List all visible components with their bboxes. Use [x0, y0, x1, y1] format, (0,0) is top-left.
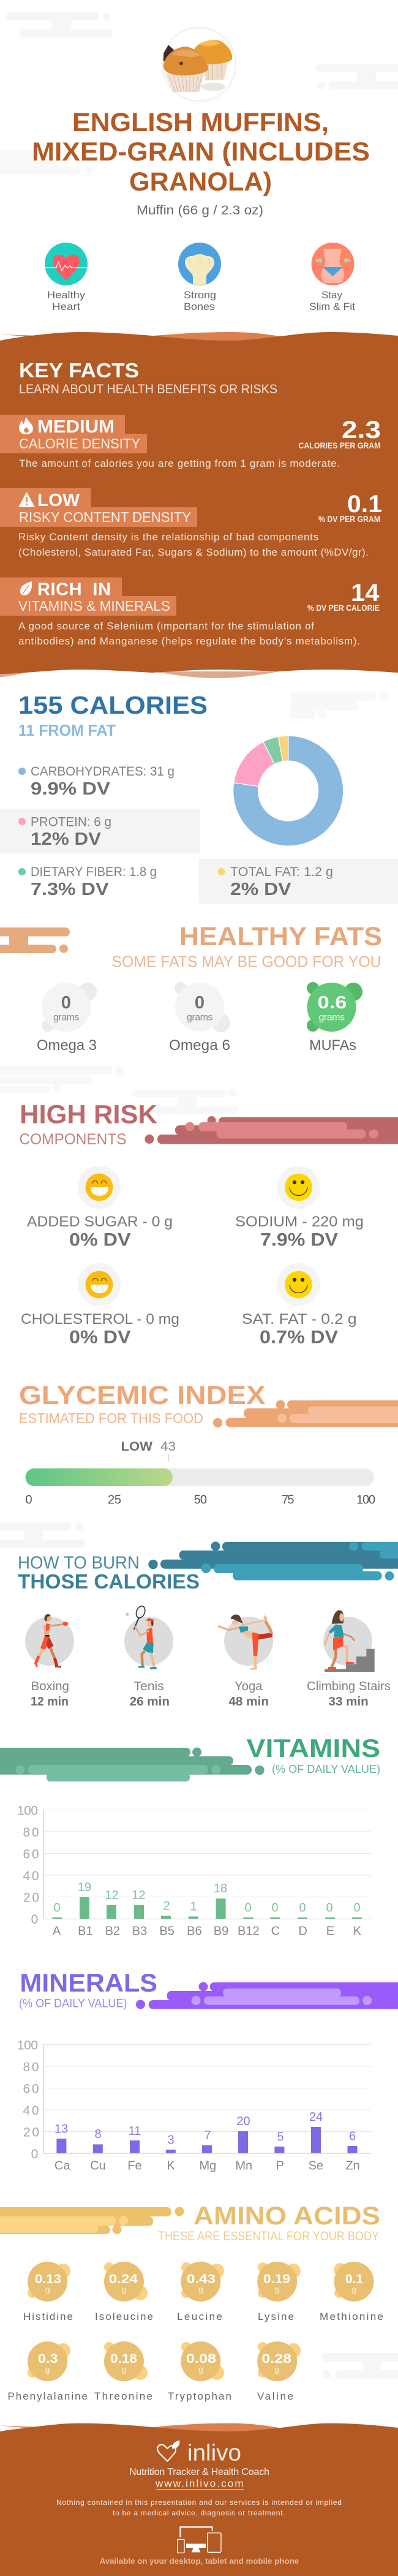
- activity: boxing: Boxing: [31, 1680, 69, 1693]
- fact: low risky content density: % DV PER GRAM: [318, 514, 380, 524]
- amino acid: methionine: Methionine: [320, 2311, 383, 2322]
- heading: key facts: KEY FACTS: [19, 359, 139, 382]
- amino acid: methionine: g: [351, 2284, 356, 2294]
- section band: burn calories: [148, 1541, 398, 1581]
- amino acid: histidine: 0.13: [35, 2272, 61, 2286]
- activity: tennis: Tenis: [134, 1680, 164, 1693]
- bar chart: minerals: 24: [309, 2110, 323, 2124]
- amino acid: tryptophan: Tryptophan: [168, 2390, 231, 2402]
- fact: low risky content density: Risky Content density is the relationship of bad components: [18, 531, 318, 543]
- fact: medium calorie density: CALORIE DENSITY: [19, 436, 140, 451]
- decorative cloud: calories: [290, 692, 389, 719]
- subheading: calories from fat: 11 FROM FAT: [18, 721, 116, 739]
- bar chart: vitamins: 100: [17, 1804, 38, 1818]
- bar chart: vitamins: B12: [238, 1925, 260, 1938]
- amino acid: tryptophan: 0.08: [186, 2352, 216, 2366]
- benefit: stay slim and fit: Stay: [321, 289, 342, 301]
- bar chart: minerals: 20: [23, 2126, 39, 2139]
- bar chart: minerals: 8: [94, 2128, 102, 2141]
- website link: www.inlivo.com: [155, 2477, 244, 2490]
- bar chart: vitamins: B2: [105, 1925, 120, 1938]
- section band: healthy fats: [0, 927, 70, 953]
- disclaimer: to be a medical advice, diagnosis or treatment.: [113, 2509, 285, 2517]
- risk: sodium: SODIUM - 220 mg: [235, 1214, 364, 1230]
- risk: added sugar: 0% DV: [69, 1230, 131, 1250]
- bar chart: vitamins: 80: [23, 1826, 39, 1840]
- benefit: strong bones: Bones: [184, 301, 215, 312]
- gauge: glycemic index: LOW: [121, 1440, 152, 1454]
- amino acid: lysine: 0.19: [263, 2272, 290, 2286]
- bar chart: vitamins: 0: [299, 1902, 306, 1915]
- serving size: Muffin (66 g / 2.3 oz): [137, 203, 263, 217]
- section band: amino acids: [0, 2207, 184, 2234]
- bar chart: minerals: 3: [167, 2133, 175, 2147]
- section band: vitamins: [0, 1747, 265, 1781]
- bar chart: minerals: 13: [54, 2122, 68, 2136]
- bar chart: minerals: 40: [23, 2104, 39, 2118]
- amino acid: isoleucine: 0.24: [109, 2272, 138, 2286]
- benefit: stay slim and fit: [309, 243, 355, 312]
- bar chart: vitamins: 18: [214, 1882, 227, 1895]
- tagline: Nutrition Tracker & Health Coach: [129, 2467, 269, 2477]
- benefit: strong bones: Strong: [184, 289, 216, 301]
- fact: low risky content density: [0, 488, 382, 558]
- food photo: muffins: [162, 28, 236, 101]
- activity: yoga: Yoga: [235, 1680, 263, 1693]
- benefit: strong bones: [178, 243, 221, 312]
- fact: medium calorie density: The amount of calories you are getting from 1 gram is moderate.: [19, 458, 340, 469]
- legend: protein: PROTEIN: 6 g: [31, 815, 111, 829]
- heading: high risk: HIGH RISK: [20, 1100, 157, 1130]
- fact: medium calorie density: CALORIES PER GRAM: [299, 440, 381, 450]
- amino acid: isoleucine: [95, 2262, 153, 2322]
- bar chart: minerals: Zn: [345, 2159, 360, 2172]
- bar chart: minerals: [17, 2039, 371, 2172]
- fat: omega 6: grams: [187, 1012, 213, 1023]
- amino acid: leucine: 0.43: [187, 2272, 216, 2286]
- amino acid: phenylalanine: Phenylalanine: [7, 2390, 88, 2402]
- fact: rich in vitamins and minerals: [0, 577, 380, 647]
- bar chart: vitamins: 20: [23, 1890, 39, 1905]
- risk: saturated fat: 0.7% DV: [260, 1328, 338, 1348]
- bar chart: vitamins: 12: [105, 1889, 119, 1902]
- subheading: minerals: (% OF DAILY VALUE): [19, 1998, 127, 2011]
- bar chart: vitamins: 60: [23, 1848, 39, 1861]
- title: GRANOLA): [129, 167, 272, 197]
- bar chart: vitamins: 0: [353, 1902, 361, 1915]
- amino acid: threonine: Threonine: [94, 2390, 152, 2402]
- amino acid: methionine: 0.1: [345, 2272, 363, 2286]
- gauge: glycemic index: 43: [160, 1440, 176, 1454]
- benefit: healthy heart: Healthy: [47, 289, 86, 301]
- bar chart: minerals: 60: [23, 2082, 39, 2096]
- amino acid: methionine: [320, 2262, 383, 2322]
- logo: inlivo: inlivo: [187, 2441, 241, 2466]
- legend: carbohydrates: 9.9% DV: [31, 779, 111, 799]
- bar chart: minerals: Se: [309, 2159, 323, 2172]
- bar chart: minerals: 5: [277, 2131, 284, 2144]
- decorative cloud: right of muffin: [315, 64, 398, 89]
- benefit: healthy heart: Heart: [52, 301, 80, 312]
- subheading: LEARN ABOUT HEALTH BENEFITS OR RISKS: [19, 382, 277, 396]
- fat: omega 6: [169, 982, 230, 1054]
- subheading: components: COMPONENTS: [20, 1131, 126, 1148]
- risk: added sugar: ADDED SUGAR - 0 g: [27, 1214, 173, 1230]
- amino acid: phenylalanine: 0.3: [38, 2352, 58, 2366]
- fat: MUFAs: 0.6: [317, 993, 347, 1013]
- bar chart: vitamins: 1: [190, 1900, 197, 1914]
- title: [32, 108, 370, 197]
- bar chart: minerals: 80: [23, 2060, 39, 2074]
- bar chart: minerals: Cu: [90, 2159, 106, 2172]
- fact: medium calorie density: 2.3: [342, 417, 381, 444]
- heading: glycemic index: GLYCEMIC INDEX: [19, 1381, 266, 1410]
- legend: total fat: TOTAL FAT: 1.2 g: [230, 865, 333, 879]
- icon: devices: [178, 2527, 221, 2553]
- bar chart: vitamins: 0: [53, 1902, 61, 1915]
- heading: how to burn: HOW TO BURN: [18, 1554, 140, 1573]
- availability note: Available on your desktop, tablet and mobile phone: [100, 2556, 299, 2566]
- fat: omega 3: Omega 3: [37, 1037, 97, 1054]
- fact: medium calorie density: [0, 415, 381, 469]
- risk: saturated fat: [242, 1263, 356, 1348]
- legend: carbohydrates: CARBOHYDRATES: 31 g: [31, 765, 175, 779]
- risk: cholesterol: [21, 1263, 179, 1348]
- gauge: glycemic index: 0: [26, 1494, 32, 1507]
- bar chart: vitamins: C: [271, 1925, 280, 1938]
- bar chart: vitamins: B5: [159, 1925, 175, 1938]
- risk: saturated fat: SAT. FAT - 0.2 g: [242, 1311, 356, 1328]
- risk: sodium: [235, 1166, 364, 1250]
- fat: MUFAs: grams: [318, 1012, 345, 1023]
- bar chart: minerals: Mn: [235, 2159, 252, 2172]
- activity: boxing: 12 min: [31, 1695, 69, 1709]
- heading: amino acids: AMINO ACIDS: [193, 2201, 380, 2230]
- bar chart: vitamins: B3: [132, 1925, 147, 1938]
- risk: added sugar: [27, 1166, 173, 1250]
- fat: MUFAs: MUFAs: [309, 1037, 356, 1054]
- amino acid: isoleucine: Isoleucine: [95, 2311, 153, 2322]
- amino acid: leucine: g: [198, 2284, 203, 2294]
- decorative cloud: above high risk: [0, 1065, 239, 1114]
- fact: rich in vitamins and minerals: % DV PER CALORIE: [307, 603, 380, 613]
- fact: low risky content density: RISKY CONTENT DENSITY: [19, 509, 191, 525]
- amino acid: valine: [257, 2341, 301, 2402]
- gauge: glycemic index: [26, 1440, 375, 1507]
- bar chart: minerals: Ca: [54, 2159, 70, 2172]
- amino acid: phenylalanine: g: [45, 2365, 50, 2374]
- activity: tennis: 26 min: [130, 1695, 170, 1709]
- benefit: healthy heart: [45, 243, 88, 312]
- gauge: glycemic index: 50: [194, 1494, 207, 1507]
- bar chart: vitamins: 0: [31, 1913, 38, 1927]
- section band: high risk: [145, 1116, 398, 1144]
- amino acid: threonine: g: [121, 2365, 126, 2374]
- panel: footer: [0, 2423, 398, 2576]
- bar chart: minerals: 11: [129, 2125, 141, 2138]
- activity: climbing stairs: Climbing Stairs: [307, 1680, 391, 1693]
- disclaimer: [56, 2498, 342, 2517]
- fact: rich in vitamins and minerals: RICH IN: [37, 580, 111, 599]
- bar chart: vitamins: A: [53, 1925, 61, 1938]
- decorative cloud: top left: [6, 12, 113, 38]
- gauge: glycemic index: 75: [282, 1494, 294, 1507]
- amino acid: isoleucine: g: [121, 2284, 126, 2294]
- amino acid: tryptophan: [168, 2341, 231, 2402]
- activity: climbing stairs: [307, 1610, 391, 1709]
- amino acid: valine: 0.28: [261, 2352, 291, 2366]
- amino acid: histidine: [23, 2262, 73, 2322]
- bar chart: vitamins: E: [326, 1925, 334, 1938]
- legend: dietary fiber: [18, 865, 157, 899]
- subheading: vitamins: (% OF DAILY VALUE): [272, 1762, 380, 1775]
- bar chart: vitamins: B1: [78, 1925, 93, 1938]
- legend: protein: 12% DV: [31, 829, 102, 849]
- bar chart: vitamins: K: [353, 1925, 362, 1938]
- legend: protein: [0, 809, 200, 854]
- bar chart: vitamins: D: [298, 1925, 307, 1938]
- decorative cloud: behind title: [0, 149, 93, 175]
- heading: healthy fats: HEALTHY FATS: [179, 922, 382, 951]
- fact: low risky content density: (Cholesterol, Saturated Fat, Sugars & Sodium) to the amount (%DV/gr).: [18, 546, 369, 558]
- subheading: glycemic index: ESTIMATED FOR THIS FOOD: [19, 1410, 203, 1426]
- amino acid: leucine: [177, 2262, 224, 2322]
- heading: minerals: MINERALS: [20, 1968, 157, 1997]
- section band: glycemic index: [213, 1400, 398, 1427]
- amino acid: threonine: [94, 2341, 152, 2402]
- activity: yoga: [218, 1615, 273, 1709]
- bar chart: minerals: 6: [349, 2130, 356, 2144]
- fat: MUFAs: [307, 982, 362, 1054]
- fact: rich in vitamins and minerals: VITAMINS & MINERALS: [18, 598, 170, 614]
- bar chart: minerals: Mg: [200, 2159, 216, 2172]
- panel: key facts: [0, 332, 398, 678]
- amino acid: lysine: g: [274, 2284, 279, 2294]
- fat: omega 6: 0: [195, 993, 205, 1013]
- gauge: glycemic index: 100: [356, 1494, 375, 1507]
- heading: calories: 155 CALORIES: [18, 691, 208, 719]
- fact: low risky content density: LOW: [37, 491, 80, 510]
- bar chart: minerals: K: [167, 2159, 175, 2172]
- amino acid: histidine: g: [45, 2284, 50, 2294]
- fact: rich in vitamins and minerals: antibodies) and Manganese (helps regulate the body’s metabolism).: [18, 635, 360, 647]
- bar chart: vitamins: 0: [271, 1902, 279, 1915]
- amino acid: lysine: Lysine: [258, 2311, 294, 2322]
- section band: minerals: [136, 1982, 398, 2009]
- benefit: stay slim and fit: Slim & Fit: [309, 301, 355, 312]
- bar chart: vitamins: 0: [244, 1902, 252, 1915]
- risk: sodium: 7.9% DV: [260, 1230, 338, 1250]
- bar chart: vitamins: 12: [132, 1889, 146, 1902]
- bar chart: minerals: P: [276, 2159, 284, 2172]
- legend: total fat: 2% DV: [230, 880, 291, 899]
- bar chart: minerals: Fe: [127, 2159, 142, 2172]
- fat: omega 3: grams: [53, 1012, 80, 1023]
- title: MIXED-GRAIN (INCLUDES: [32, 137, 370, 167]
- bar chart: vitamins: 0: [326, 1902, 333, 1915]
- activity: yoga: 48 min: [228, 1695, 269, 1709]
- heading: vitamins: VITAMINS: [246, 1734, 380, 1762]
- bar chart: vitamins: 19: [78, 1881, 91, 1894]
- amino acid: valine: g: [274, 2365, 279, 2374]
- risk: cholesterol: CHOLESTEROL - 0 mg: [21, 1311, 179, 1328]
- activity: boxing: [25, 1614, 74, 1709]
- activity: tennis: [124, 1605, 173, 1709]
- gauge: glycemic index: 25: [108, 1494, 121, 1507]
- bar chart: minerals: 0: [31, 2147, 38, 2161]
- bar chart: vitamins: B6: [187, 1925, 202, 1938]
- fact: low risky content density: 0.1: [347, 491, 382, 518]
- amino acid: tryptophan: g: [198, 2365, 203, 2374]
- decorative cloud: above burn section: [0, 1522, 85, 1548]
- bar chart: minerals: 7: [204, 2129, 211, 2142]
- legend: dietary fiber: 7.3% DV: [31, 880, 109, 899]
- fat: omega 3: [37, 983, 97, 1054]
- bar chart: vitamins: 2: [163, 1899, 170, 1913]
- bar chart: vitamins: [17, 1804, 371, 1938]
- amino acid: valine: Valine: [257, 2390, 293, 2402]
- amino acid: leucine: Leucine: [177, 2311, 222, 2322]
- fact: medium calorie density: MEDIUM: [37, 417, 115, 437]
- amino acid: histidine: Histidine: [23, 2311, 73, 2322]
- disclaimer: Nothing contained in this presentation and our services is intended or implied: [56, 2498, 342, 2507]
- amino acid: threonine: 0.18: [110, 2352, 137, 2366]
- bar chart: minerals: 100: [17, 2039, 38, 2052]
- subheading: healthy fats: SOME FATS MAY BE GOOD FOR YOU: [111, 953, 381, 971]
- heading: those calories: THOSE CALORIES: [18, 1570, 200, 1593]
- decorative cloud: right of amino acids: [321, 2353, 398, 2379]
- bar chart: vitamins: 40: [23, 1869, 39, 1883]
- donut chart: macronutrients: [233, 736, 344, 846]
- amino acid: lysine: [257, 2262, 301, 2322]
- fact: rich in vitamins and minerals: A good source of Selenium (important for the stimulation of: [18, 620, 314, 632]
- legend: carbohydrates: [18, 765, 175, 799]
- title: ENGLISH MUFFINS,: [72, 108, 329, 137]
- fat: omega 3: 0: [61, 993, 71, 1013]
- amino acid: phenylalanine: [7, 2341, 88, 2402]
- bar chart: minerals: 20: [236, 2115, 250, 2128]
- logo: inlivo: [157, 2441, 241, 2466]
- fact: rich in vitamins and minerals: 14: [351, 580, 380, 606]
- fat: omega 6: Omega 6: [169, 1037, 230, 1054]
- activity: climbing stairs: 33 min: [328, 1695, 369, 1709]
- legend: total fat: [199, 859, 398, 904]
- risk: cholesterol: 0% DV: [69, 1328, 131, 1348]
- legend: dietary fiber: DIETARY FIBER: 1.8 g: [31, 865, 157, 879]
- bar chart: vitamins: B9: [214, 1925, 228, 1938]
